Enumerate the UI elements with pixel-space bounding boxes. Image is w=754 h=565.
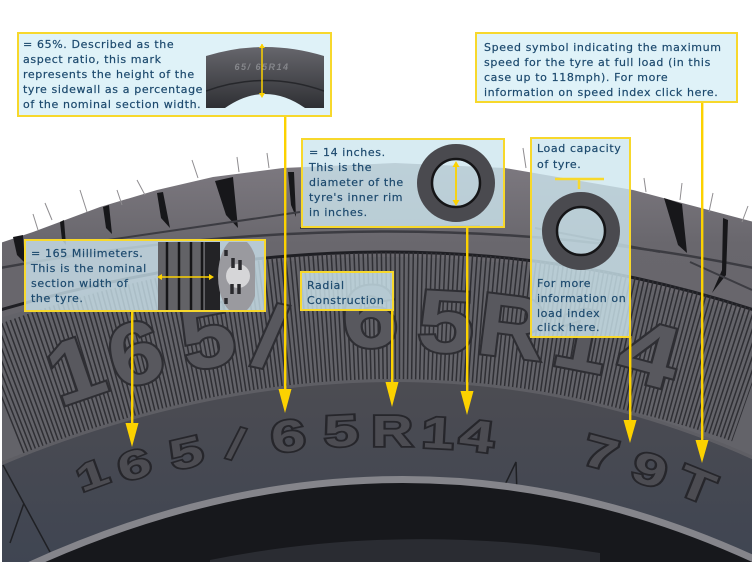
small moulded size marking 165/65R14: 4	[457, 410, 497, 463]
rim diameter text: This is the	[308, 161, 372, 174]
large moulded size marking: 4	[608, 298, 691, 409]
icon: tyre	[550, 200, 612, 262]
small moulded size marking 165/65R14: 5	[323, 407, 359, 457]
tyre photograph	[0, 148, 754, 565]
icon: tyre with diameter arrow	[425, 152, 487, 214]
ribbed sidewall band	[0, 257, 754, 470]
bracket pointing to load tyre	[555, 179, 604, 189]
radial construction text: Construction	[307, 294, 384, 307]
load index text: For more	[537, 277, 591, 290]
small moulded size marking 165/65R14: 1	[421, 408, 455, 458]
rim diameter text: diameter of the	[309, 176, 404, 189]
icon: wheel front view with width arrow	[158, 242, 255, 310]
icon: tyre sidewall with height arrow	[206, 44, 324, 108]
aspect ratio text: = 65%. Described as the	[23, 38, 174, 51]
large moulded size marking: 1	[546, 286, 618, 393]
load index text: click here.	[537, 321, 600, 334]
load capacity text: of tyre.	[537, 158, 581, 171]
rim diameter text: = 14 inches.	[309, 146, 386, 159]
small moulded load and speed marking 79T	[586, 432, 722, 503]
load index text: load index	[537, 307, 600, 320]
arrow: aspect ratio to 65	[278, 115, 292, 413]
icon: tyre sidewall with height arrow: 65/ 65R14	[234, 62, 290, 72]
rim bead and inner tyre	[30, 479, 754, 565]
rim diameter text: in inches.	[309, 206, 368, 219]
section width text: This is the nominal	[30, 262, 147, 275]
panel: speed symbol	[476, 33, 737, 102]
section width text: the tyre.	[31, 292, 84, 305]
large moulded size marking: 5	[171, 283, 243, 390]
large moulded size marking: 1	[34, 314, 117, 425]
aspect ratio text: tyre sidewall as a percentage	[23, 83, 203, 96]
load capacity text: Load capacity	[537, 142, 621, 155]
arrow: speed symbol to T	[696, 101, 708, 463]
speed symbol text: case up to 118mph). For more	[484, 71, 668, 84]
small moulded size marking 165/65R14: /	[223, 419, 248, 470]
small moulded size marking 165/65R14	[76, 413, 496, 494]
section width text: section width of	[31, 277, 129, 290]
panel: rim diameter	[302, 139, 504, 227]
small moulded size marking 165/65R14: R	[371, 406, 413, 455]
arrow: section width to 165	[126, 310, 138, 447]
load index text: information on	[537, 292, 626, 305]
small moulded load and speed marking 79T: 7	[578, 426, 623, 481]
large moulded size marking	[48, 284, 678, 408]
arrow: load capacity to 79	[624, 336, 636, 443]
small moulded size marking 165/65R14: 5	[165, 427, 208, 479]
small moulded size marking 165/65R14: 6	[112, 438, 157, 491]
speed symbol text: Speed symbol indicating the maximum	[484, 41, 722, 54]
lower sidewall band	[0, 380, 754, 565]
rim diameter text: tyre's inner rim	[309, 191, 403, 204]
tyre tread and shoulder	[2, 163, 752, 318]
large moulded size marking: 5	[415, 272, 477, 373]
large moulded size marking: 6	[340, 267, 400, 367]
panel: aspect ratio	[18, 33, 331, 116]
panel: radial construction	[301, 272, 393, 310]
small moulded load and speed marking 79T: 9	[626, 442, 673, 499]
aspect ratio text: aspect ratio, this mark	[23, 53, 162, 66]
arrow: rim diameter to 14	[460, 226, 474, 415]
arrow: radial construction to R	[386, 310, 398, 407]
large moulded size marking: /	[246, 285, 293, 388]
section width text: = 165 Millimeters.	[31, 247, 143, 260]
large moulded size marking: R	[473, 274, 551, 380]
small moulded size marking 165/65R14: 1	[70, 450, 115, 500]
aspect ratio text: represents the height of the	[23, 68, 195, 81]
radial construction text: Radial	[307, 279, 345, 292]
panel: section width	[25, 238, 265, 314]
large moulded size marking: 6	[97, 299, 174, 408]
tread hair spikes	[33, 148, 748, 230]
speed symbol text: speed for the tyre at full load (in this	[484, 56, 711, 69]
aspect ratio text: of the nominal section width.	[23, 98, 201, 111]
speed symbol text: information on speed index click here.	[484, 86, 718, 99]
small moulded load and speed marking 79T: T	[670, 456, 722, 515]
small moulded size marking 165/65R14: 6	[269, 411, 308, 463]
panel: load capacity	[531, 138, 630, 337]
